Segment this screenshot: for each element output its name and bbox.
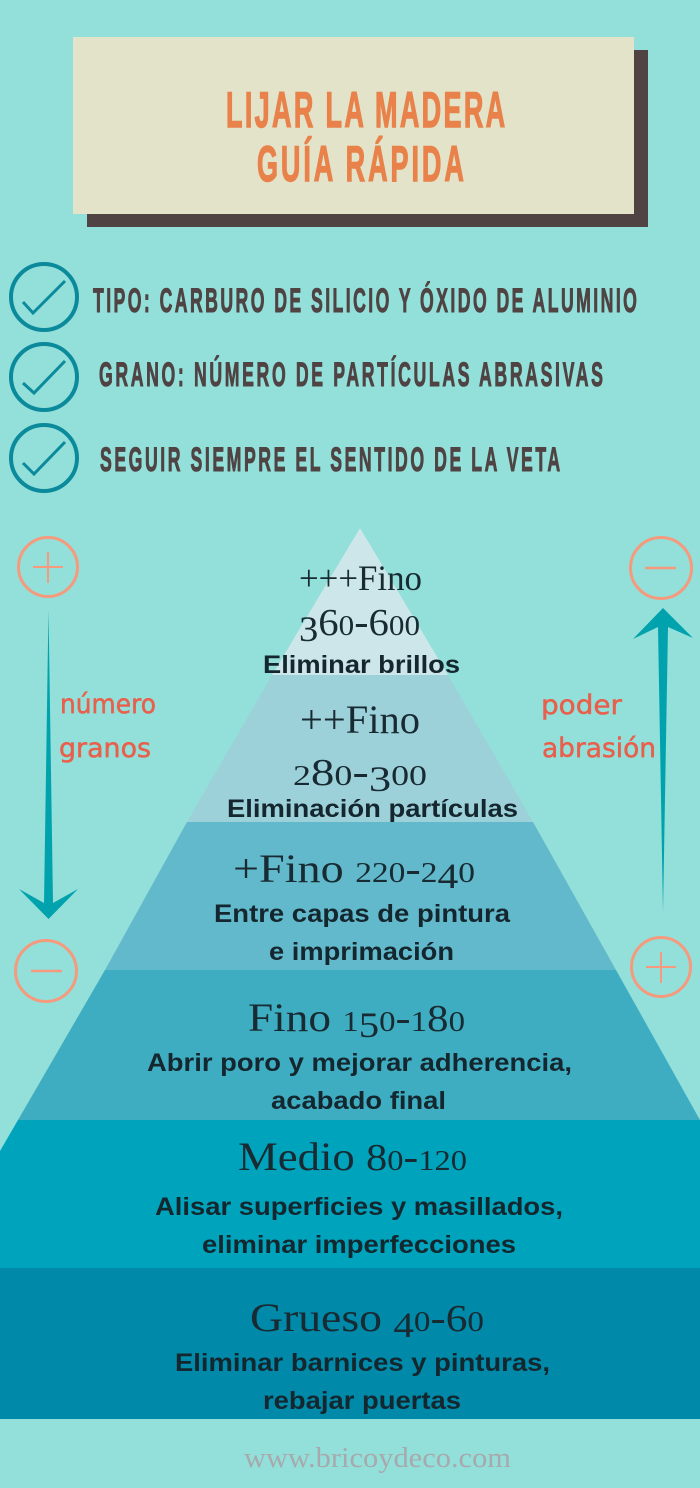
layer: +++Fino: Eliminar brillos	[263, 651, 460, 679]
title: LIJAR LA MADERA	[226, 82, 505, 138]
label: número granos: granos	[59, 733, 151, 764]
icon: minus	[16, 940, 76, 1002]
website: www.bricoydeco.com	[244, 1442, 511, 1474]
layer: Medio: Alisar superficies y masillados,	[155, 1193, 563, 1221]
icon: check 3	[11, 425, 77, 491]
layer: ++Fino	[187, 675, 533, 823]
layer: +Fino: +Fino 220-240	[233, 846, 475, 896]
layer: Grueso: Grueso 40-60	[250, 1295, 484, 1345]
layer: Grueso: rebajar puertas	[263, 1387, 461, 1415]
arrow: down	[19, 610, 78, 919]
layer: ++Fino: 280-300	[293, 749, 427, 799]
layer: +Fino: Entre capas de pintura	[214, 900, 511, 928]
layer: Fino: Fino 150-180	[248, 995, 465, 1045]
layer: ++Fino: Eliminación partículas	[227, 795, 518, 823]
left scale: número granos	[16, 538, 156, 1002]
layer: ++Fino: ++Fino	[300, 697, 420, 742]
title panel	[73, 37, 648, 227]
layer: Medio: eliminar imperfecciones	[202, 1231, 516, 1259]
layer: Fino: acabado final	[271, 1087, 446, 1115]
checklist	[11, 264, 637, 491]
layer: Fino: Abrir poro y mejorar adherencia,	[147, 1049, 572, 1077]
layer: +++Fino: +++Fino	[299, 558, 422, 598]
layer: Grueso	[0, 1268, 700, 1419]
label: número granos: número	[60, 689, 156, 720]
icon: plus	[632, 938, 690, 996]
item: tipo: TIPO: CARBURO DE SILICIO Y ÓXIDO DE ALUMINIO	[93, 281, 637, 320]
label: poder abrasión: abrasión	[542, 733, 656, 764]
item: grano: GRANO: NÚMERO DE PARTÍCULAS ABRASIVAS	[99, 355, 603, 394]
layer: +Fino: e imprimación	[269, 938, 454, 966]
title	[226, 82, 505, 192]
right scale: poder abrasión	[541, 538, 693, 996]
label: número granos	[59, 689, 156, 764]
layer: +++Fino	[263, 528, 460, 679]
layer: +Fino	[105, 822, 616, 970]
icon: plus	[18, 538, 78, 596]
icon: minus	[630, 538, 692, 598]
item: veta: SEGUIR SIEMPRE EL SENTIDO DE LA VETA	[100, 440, 560, 479]
layer: Medio: Medio 80-120	[238, 1134, 467, 1179]
layer: Medio	[0, 1120, 700, 1268]
label: poder abrasión: poder	[541, 690, 623, 721]
layer: Fino	[18, 970, 700, 1120]
icon: check 1	[11, 264, 77, 330]
title: GUÍA RÁPIDA	[257, 135, 464, 192]
arrow: up	[633, 608, 693, 912]
icon: check 2	[11, 344, 77, 410]
pyramid	[0, 528, 700, 1419]
layer: +++Fino: 360-600	[299, 599, 420, 649]
layer: Grueso: Eliminar barnices y pinturas,	[175, 1349, 550, 1377]
label: poder abrasión	[541, 690, 656, 764]
